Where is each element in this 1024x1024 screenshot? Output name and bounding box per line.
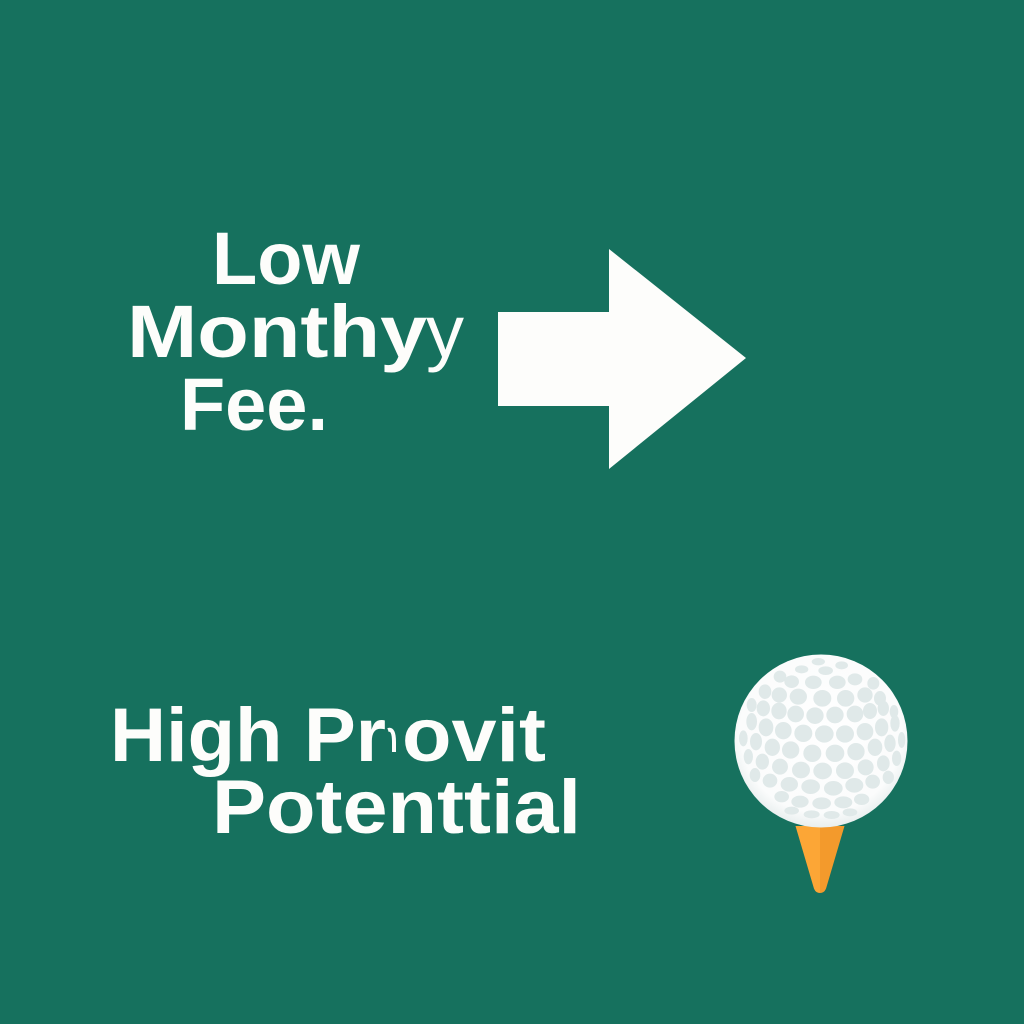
text block: low monthly fee: Fee. <box>180 363 328 446</box>
arrow pointing right <box>498 249 746 469</box>
text block: low monthly fee: Low <box>212 217 360 300</box>
text block: high profit potential <box>110 693 581 850</box>
golf tee <box>796 826 844 893</box>
text block: high profit potential: ovit <box>402 693 546 778</box>
text block: high profit potential: High Pr <box>110 693 386 778</box>
icon: golf ball on tee <box>734 654 908 893</box>
text block: low monthly fee: y <box>426 290 464 373</box>
text block: high profit potential: Potenttial <box>212 765 581 850</box>
text block: low monthly fee: Monthy <box>127 290 427 373</box>
golf ball <box>734 654 908 828</box>
text block: low monthly fee <box>127 217 464 446</box>
